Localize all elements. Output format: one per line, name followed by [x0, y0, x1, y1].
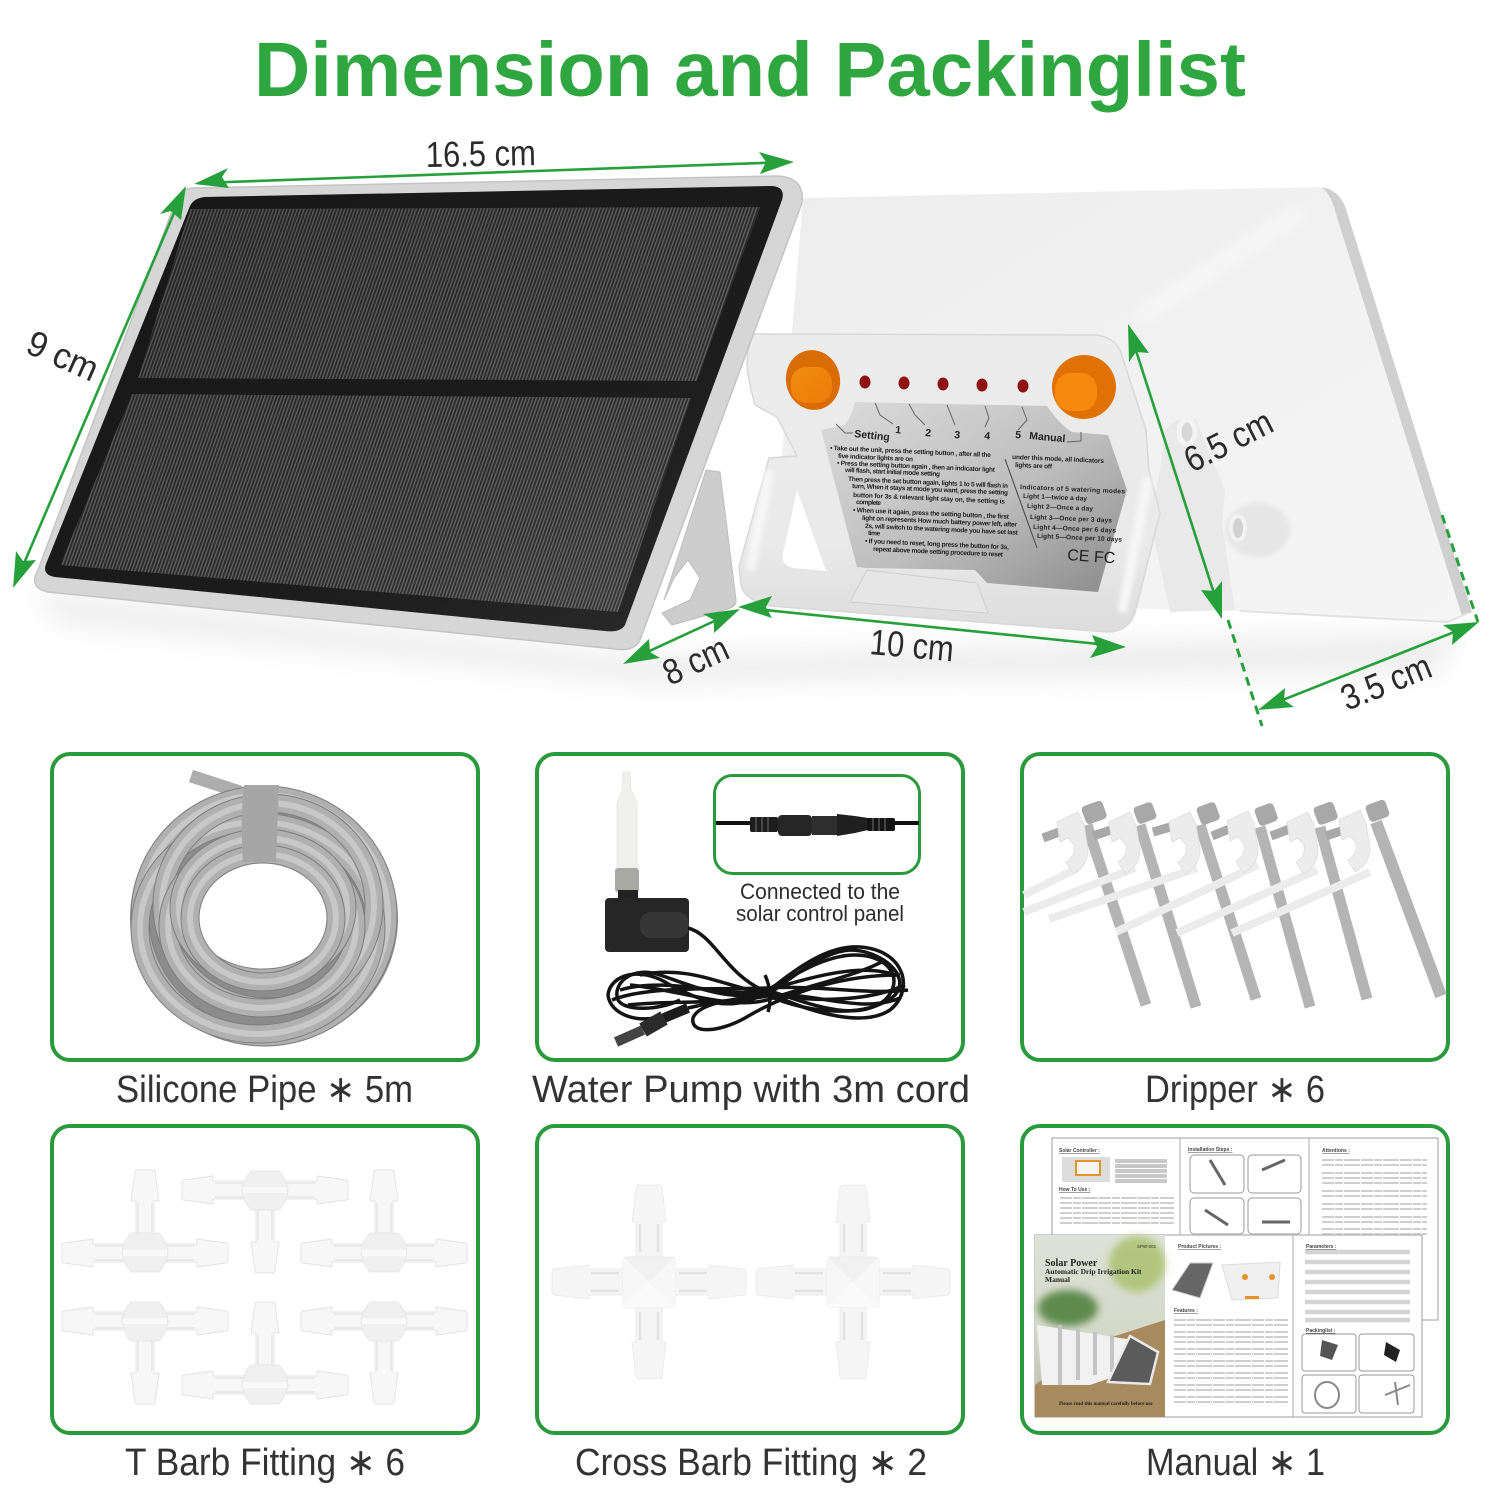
- column divider: [1005, 459, 1037, 548]
- label text left column: button for 3s & relevant light stay on, the setting is: [853, 492, 1005, 506]
- label text left column: complete: [856, 499, 882, 507]
- manual cover photo: Manual: [1045, 1275, 1070, 1284]
- dimension labels: 6.5 cm: [1177, 401, 1279, 480]
- dimension labels: 9 cm: [21, 322, 105, 389]
- bracket hole upper: [1179, 420, 1195, 444]
- dimension illustration: [13, 132, 1479, 726]
- parameters page: Parameters :: [1306, 1244, 1337, 1250]
- caps: [1081, 799, 1390, 827]
- label text right column: Light 2—Once a day: [1027, 503, 1093, 513]
- frame highlight: [750, 470, 1148, 612]
- right side edge: [1322, 187, 1472, 616]
- label text right column: lights are off: [1015, 462, 1053, 471]
- controller frame: [739, 334, 1160, 632]
- floor shadow: [30, 590, 1460, 685]
- button and indicator labels: Setting: [854, 428, 890, 444]
- label text left column: Then press the set button again, lights 1 to 5 will flash in: [848, 476, 1008, 490]
- caption: manual: Manual ∗ 1: [1146, 1442, 1325, 1484]
- caption: T barb: T Barb Fitting ∗ 6: [125, 1442, 405, 1484]
- caption: water pump: Water Pump with 3m cord: [532, 1069, 970, 1111]
- dimension labels: 3.5 cm: [1335, 645, 1437, 718]
- callout text: [736, 879, 904, 926]
- label text left column: light on represents How much battery power left, after: [862, 515, 1017, 529]
- dimension labels: 8 cm: [656, 627, 735, 693]
- panel: silicone pipe: [52, 754, 478, 1060]
- icon: pipe coil: [130, 776, 398, 1044]
- product pictures page: [1172, 1244, 1288, 1402]
- panel back shell: [770, 187, 1470, 623]
- pump body: [605, 898, 689, 952]
- label text right column: Light 4—Once per 6 days: [1033, 524, 1116, 535]
- button and indicator labels: [854, 424, 1066, 445]
- connector: [716, 814, 919, 836]
- handle tab: [850, 570, 988, 613]
- manual back sheet: How To Use :: [1059, 1187, 1091, 1193]
- panel: water pump: [537, 754, 963, 1060]
- label text right column: CE FC: [1067, 547, 1116, 567]
- label text left column: will flash, start initial mode setting: [844, 467, 940, 478]
- side stubs: [1043, 826, 1344, 838]
- arrow: length 10 cm: [738, 596, 1126, 658]
- button and indicator labels: 4: [984, 430, 991, 443]
- label text left column: turn, When it stays at mode you want, press the setting: [852, 483, 1008, 497]
- manual cover photo: Please read this manual carefully before use: [1059, 1402, 1153, 1407]
- arrow: height 9 cm: [13, 186, 186, 588]
- button and indicator labels: 2: [925, 427, 932, 440]
- nozzle ring: [615, 868, 639, 892]
- manual button: [1046, 349, 1122, 425]
- icon: two cross fittings: [552, 1185, 950, 1379]
- indicator leader lines: [836, 403, 1081, 442]
- manual cover photo: Solar Power: [1045, 1258, 1098, 1269]
- product pictures page: Features :: [1174, 1308, 1198, 1314]
- button and indicator labels: Manual: [1029, 430, 1066, 445]
- panel: manual: [1022, 1126, 1448, 1433]
- solar panel front: [35, 176, 802, 650]
- button and indicator labels: 1: [895, 424, 902, 437]
- back view of device: [739, 187, 1472, 632]
- label text left column: time: [868, 530, 881, 538]
- caption: cross barb: Cross Barb Fitting ∗ 2: [575, 1442, 927, 1484]
- kickstand: [662, 470, 736, 625]
- glass sheen: [45, 186, 783, 631]
- white hooks and tails: [1024, 810, 1370, 933]
- panel: drippers: [1022, 754, 1448, 1060]
- dimension labels: 10 cm: [868, 621, 956, 669]
- nozzle: [617, 772, 637, 870]
- manual cover photo: SPW-001: [1137, 1244, 1157, 1249]
- icon: pump with cord: [605, 772, 908, 1042]
- button and indicator labels: 3: [954, 429, 961, 442]
- label text right column: Indicators of 5 watering modes: [1020, 484, 1125, 496]
- label text left column: • Take out the unit, press the setting button , after all the: [830, 445, 991, 459]
- manual back sheet: Attentions :: [1322, 1148, 1350, 1154]
- callout text: Connected to the: [740, 879, 900, 904]
- plug: [616, 1008, 688, 1042]
- dimension labels: [21, 132, 1437, 718]
- manual front sheet: [1035, 1235, 1422, 1417]
- label text left column: • Press the setting button again , then an indicator light: [837, 460, 996, 474]
- upper solar cell: [138, 207, 760, 381]
- panel frame: [35, 176, 802, 650]
- caption: silicone pipe: Silicone Pipe ∗ 5m: [116, 1069, 413, 1111]
- coil tubes: [140, 795, 388, 1037]
- pipe tail: [191, 776, 240, 792]
- label text right column: under this mode, all indicators: [1012, 454, 1104, 465]
- instruction label: [821, 402, 1127, 592]
- icon: six T fittings: [62, 1170, 467, 1404]
- handle window: [783, 490, 826, 571]
- button and indicator labels: 5: [1015, 429, 1022, 442]
- cord bundle: [608, 928, 908, 1030]
- stems: [1087, 822, 1441, 1007]
- callout: connector inset: [714, 776, 920, 874]
- label text left column: • If you need to reset, long press the button for 3s,: [865, 538, 1009, 551]
- label text right column: Light 1—twice a day: [1023, 493, 1087, 503]
- panel glass: [45, 186, 783, 631]
- manual cover photo: [1035, 1235, 1165, 1417]
- manual back sheet: Installation Steps :: [1188, 1147, 1233, 1153]
- five indicator LEDs: [860, 376, 1028, 392]
- label text right column: Light 5—Once per 10 days: [1037, 533, 1122, 544]
- parameters page: [1302, 1244, 1414, 1413]
- label text left column: five indicator lights are on: [838, 453, 913, 463]
- lower solar cell: [60, 394, 691, 612]
- icon: six drippers: [1024, 799, 1441, 1007]
- arrow: depth 3.5 cm with dashed guides: [1228, 515, 1479, 726]
- label plate: [821, 402, 1127, 592]
- label text left column: 2s, will switch to the watering mode you have set last: [865, 523, 1019, 537]
- callout text: solar control panel: [736, 901, 904, 926]
- caption: dripper: Dripper ∗ 6: [1145, 1069, 1325, 1111]
- velcro strap: [242, 785, 279, 862]
- manual back sheet: [1052, 1138, 1438, 1320]
- manual cover photo: Automatic Drip Irrigation Kit: [1045, 1267, 1142, 1276]
- label text left column: • When use it again, press the setting button , the first: [853, 507, 1010, 521]
- arrow: height 6.5 cm: [1128, 324, 1222, 619]
- arrow: width 16.5 cm: [194, 152, 794, 188]
- manual back sheet: Solar Controller :: [1059, 1148, 1100, 1154]
- product pictures page: Product Pictures :: [1178, 1244, 1221, 1250]
- support bracket: [1150, 418, 1235, 612]
- label text left column: [830, 445, 1019, 559]
- arrow: depth 8 cm: [623, 609, 740, 664]
- shell ridge highlight: [1140, 212, 1300, 317]
- coil underlay: [130, 788, 398, 1044]
- title: Dimension and Packinglist: [254, 27, 1246, 113]
- bracket hole lower: [1226, 503, 1290, 557]
- label text right column: Light 3—Once per 3 days: [1030, 514, 1112, 525]
- dimension labels: 16.5 cm: [425, 132, 536, 175]
- label text left column: repeat above mode setting procedure to reset: [873, 546, 1004, 559]
- setting button: [780, 345, 846, 415]
- label text right column: [1012, 454, 1125, 567]
- parameters page: Packinglist :: [1306, 1328, 1336, 1334]
- panel: T barb fittings: [52, 1126, 478, 1433]
- panel: cross barb fittings: [537, 1126, 963, 1433]
- bottom edge: [1240, 611, 1468, 622]
